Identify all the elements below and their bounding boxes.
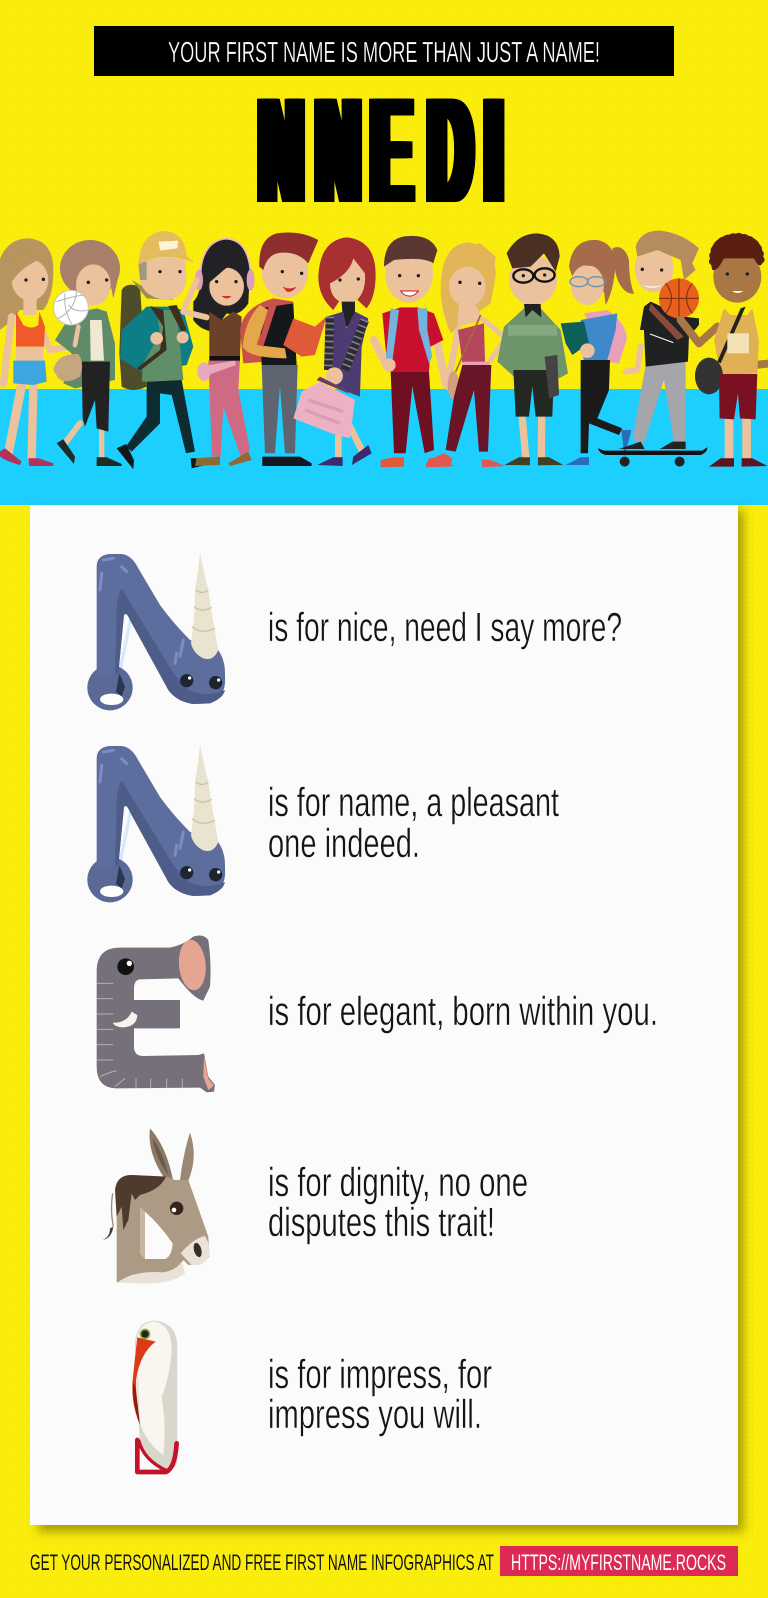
title: name: N bbox=[253, 66, 296, 234]
blue floor band bbox=[0, 389, 768, 505]
text: D dignity: is for dignity, no one bbox=[268, 1159, 528, 1205]
person 8: blonde girl bbox=[426, 242, 506, 467]
person 11: skateboarder with basketball bbox=[598, 231, 707, 467]
person 4: girl with headphones bbox=[183, 239, 255, 466]
panel shadow bbox=[38, 510, 744, 1532]
person 1: girl in orange top bbox=[0, 238, 78, 466]
text: D dignity: disputes this trait! bbox=[268, 1199, 495, 1245]
text: N name: is for name, a pleasant bbox=[268, 779, 559, 825]
letter E elephant icon bbox=[97, 936, 215, 1092]
person 9: boy with glasses bbox=[497, 233, 568, 465]
title: name: I bbox=[479, 66, 496, 234]
title: name: N bbox=[310, 66, 353, 234]
person 5: boy reading a book bbox=[240, 232, 327, 466]
title: name: E bbox=[365, 66, 405, 234]
person 6: girl with pink bag bbox=[293, 237, 376, 466]
text: N nice: is for nice, need I say more? bbox=[268, 604, 622, 650]
text: I impress bbox=[268, 1351, 492, 1437]
header banner bbox=[94, 26, 674, 76]
footer call to action: GET YOUR PERSONALIZED AND FREE FIRST NAME INFOGRAPHICS AT bbox=[30, 1550, 494, 1575]
crowd illustration bbox=[0, 231, 768, 469]
person 7: boy in red shirt bbox=[374, 236, 454, 467]
letter D donkey icon bbox=[103, 1128, 209, 1284]
person 3: hiker with cap and backpack bbox=[117, 231, 213, 469]
text: N name: one indeed. bbox=[268, 820, 420, 866]
person 12: boy in yellow tank bbox=[681, 233, 768, 467]
person 10: girl with tablet bbox=[561, 240, 634, 465]
title: name bbox=[253, 66, 504, 234]
letter N narwhal icon (first) bbox=[87, 552, 225, 710]
letter I stork icon bbox=[132, 1321, 177, 1472]
person 2: girl with volleyball bbox=[53, 240, 122, 466]
white content panel bbox=[30, 505, 738, 1525]
text: D dignity bbox=[268, 1159, 528, 1245]
text: I impress: is for impress, for bbox=[268, 1351, 492, 1397]
letter N narwhal icon (second) bbox=[87, 744, 225, 902]
text: N name bbox=[268, 779, 559, 866]
title: name: D bbox=[422, 66, 465, 234]
text: I impress: impress you will. bbox=[268, 1391, 482, 1437]
